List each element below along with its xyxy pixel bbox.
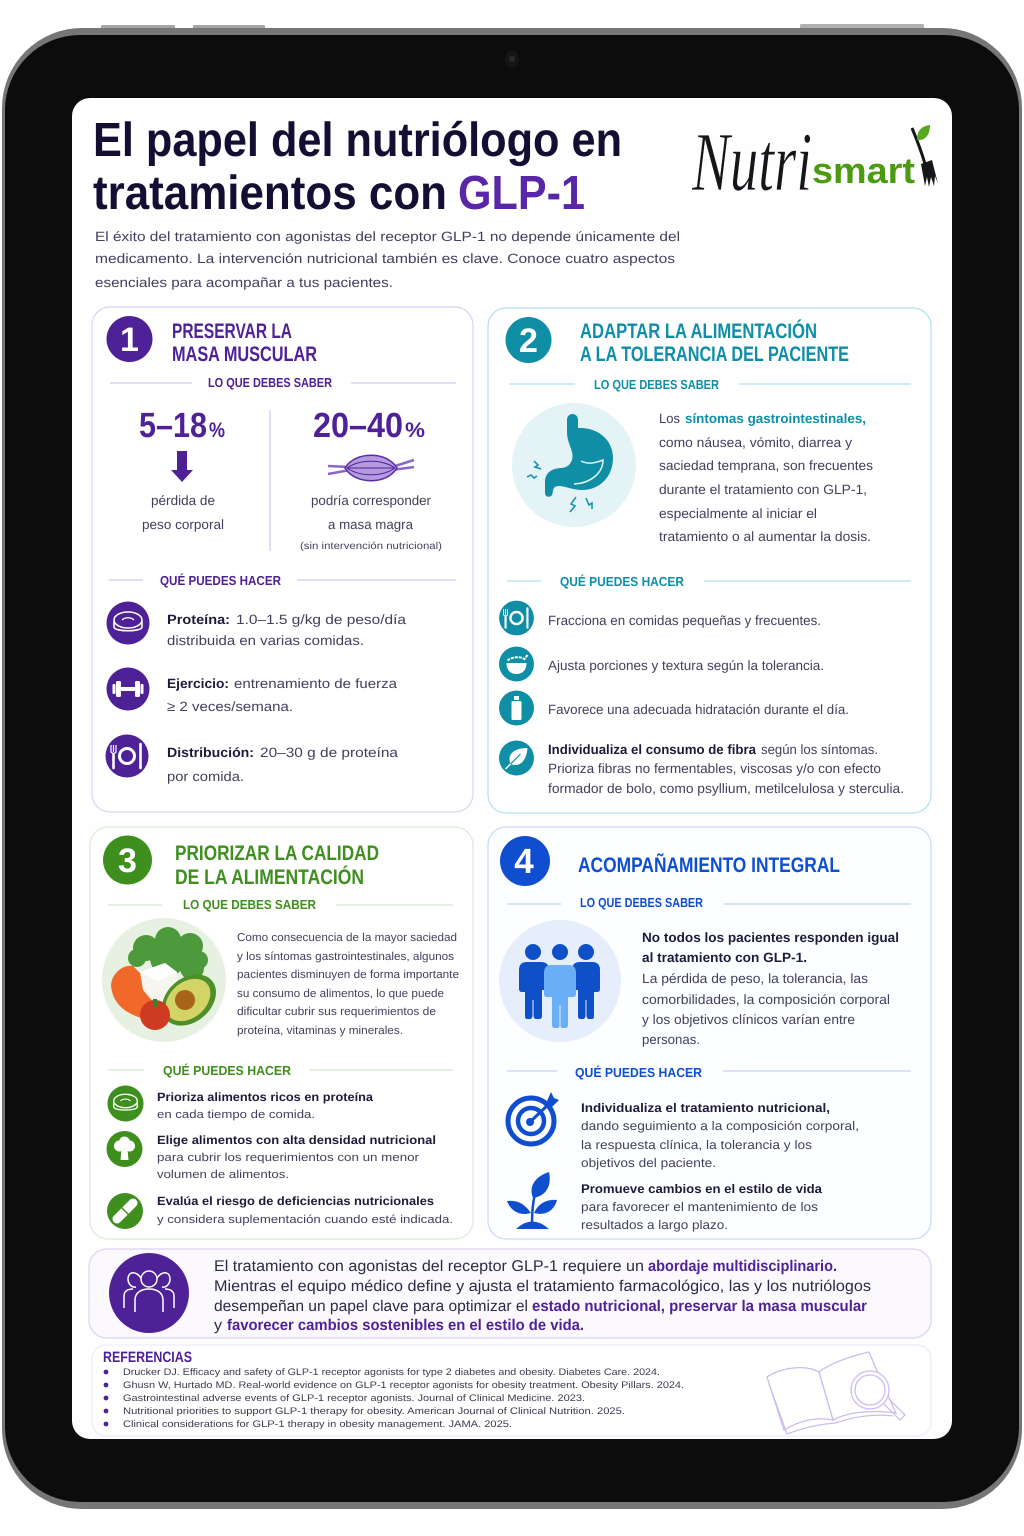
heading 2	[580, 319, 849, 366]
text: no todos los pacientes: y los objetivos clínicos varían entre	[642, 1012, 855, 1027]
banner text: El tratamiento con agonistas del receptor GLP-1 requiere un	[214, 1258, 644, 1275]
reference list: Ghusn W, Hurtado MD. Real-world evidence on GLP-1 receptor agonists for obesity treatment. Obesity Pillars. 2024.	[123, 1380, 684, 1391]
icon: bottle	[499, 690, 534, 726]
icon: group of people	[499, 920, 621, 1042]
text: síntomas gastrointestinales: saciedad temprana, son frecuentes	[659, 458, 873, 473]
icon: protein bowl	[107, 1085, 144, 1122]
text: síntomas gastrointestinales	[659, 411, 873, 544]
intro text: medicamento. La intervención nutricional también es clave. Conoce cuatro aspectos	[95, 251, 675, 266]
item: prioriza: en cada tiempo de comida.	[157, 1109, 315, 1121]
subheading: qué puedes hacer: QUÉ PUEDES HACER	[575, 1065, 703, 1080]
item: ejercicio: Ejercicio:	[167, 676, 229, 691]
text: consecuencia: pacientes disminuyen de forma importante	[237, 969, 459, 981]
label: podría corresponder a masa magra	[300, 493, 442, 552]
text: consecuencia	[237, 932, 459, 1037]
text: consecuencia: dificultar cubrir sus requerimientos de	[237, 1006, 436, 1018]
icon: down arrow	[171, 451, 193, 482]
item: individualiza tratamiento: la respuesta clínica, la tolerancia y los	[581, 1138, 812, 1152]
item: proteína: 1.0–1.5 g/kg de peso/día	[236, 612, 407, 627]
reference list: Drucker DJ. Efficacy and safety of GLP-1 receptor agonists for type 2 diabetes and obesity. Diabetes Care. 2024.	[123, 1367, 660, 1378]
label: pérdida de peso corporal: peso corporal	[142, 517, 224, 532]
label: podría corresponder a masa magra: a masa magra	[328, 517, 413, 532]
item: elige: para cubrir los requerimientos con un menor	[157, 1152, 419, 1164]
text: síntomas gastrointestinales: síntomas gastrointestinales,	[685, 411, 866, 426]
item: distribución: 20–30 g de proteína	[260, 745, 399, 760]
label: podría corresponder a masa magra: podría corresponder	[311, 493, 431, 508]
reference list: Clinical considerations for GLP-1 therapy in obesity management. JAMA. 2025.	[123, 1419, 512, 1430]
banner text: favorecer cambios sostenibles en el estilo de vida.	[227, 1317, 584, 1334]
item: promueve: Promueve cambios en el estilo de vida	[581, 1182, 823, 1196]
text: no todos los pacientes	[642, 930, 899, 1047]
item: promueve: resultados a largo plazo.	[581, 1218, 728, 1232]
heading 1	[172, 320, 317, 366]
text: síntomas gastrointestinales: tratamiento o al aumentar la dosis.	[659, 529, 871, 544]
reference list: Gastrointestinal adverse events of GLP-1 receptor agonists. Journal of Clinical Medicine. 2023.	[123, 1393, 585, 1404]
label: pérdida de peso corporal: pérdida de	[151, 493, 215, 508]
icon: protein bowl	[106, 602, 150, 644]
subheading: lo que debes saber: LO QUE DEBES SABER	[594, 377, 720, 392]
logo: Nutrismart: Nutri	[691, 116, 812, 209]
text: consecuencia: su consumo de alimentos, lo que puede	[237, 988, 444, 1000]
title: GLP-1	[458, 167, 585, 220]
panel: referencias	[92, 1345, 931, 1436]
icon: plate	[106, 734, 148, 778]
banner text	[214, 1258, 871, 1334]
heading 3: PRIORIZAR LA CALIDAD	[175, 842, 379, 865]
text: síntomas gastrointestinales: como náusea, vómito, diarrea y	[659, 435, 852, 450]
text: síntomas gastrointestinales: especialmente al iniciar el	[659, 506, 817, 521]
reference list: Nutritional priorities to support GLP-1 therapy for obesity. American Journal of Clinical Nutrition. 2025.	[123, 1406, 625, 1417]
number badge 2	[506, 317, 552, 363]
heading 1: PRESERVAR LA	[172, 320, 292, 343]
item: fracciona: Fracciona en comidas pequeñas y frecuentes.	[548, 613, 821, 628]
icon: target	[508, 1092, 559, 1144]
icon: stomach	[512, 403, 636, 527]
stat: 20-40%: %	[405, 419, 425, 442]
stat: 20-40%: 20–40	[313, 406, 403, 445]
item: promueve: para favorecer el mantenimiento de los	[581, 1200, 818, 1214]
item: elige: Elige alimentos con alta densidad nutricional	[157, 1133, 436, 1147]
item: ajusta: Ajusta porciones y textura según la tolerancia.	[548, 658, 824, 673]
banner text: y	[214, 1317, 222, 1334]
item: prioriza	[157, 1090, 373, 1121]
heading: referencias: REFERENCIAS	[103, 1349, 192, 1366]
icon: bowl	[499, 646, 534, 682]
text: síntomas gastrointestinales: Los	[659, 411, 680, 426]
banner text: desempeñan un papel clave para optimizar el	[214, 1298, 528, 1315]
panel 4: acompañamiento integral	[488, 827, 931, 1239]
item: distribución: por comida.	[167, 769, 244, 784]
item: elige: volumen de alimentos.	[157, 1169, 289, 1181]
number badge 3	[103, 836, 152, 884]
heading 4: ACOMPAÑAMIENTO INTEGRAL	[578, 853, 840, 877]
icon: capsule	[107, 1193, 143, 1229]
panel 2: adaptar la alimentación	[488, 308, 931, 813]
icon: leaf	[499, 740, 534, 776]
icon: muscle	[328, 455, 414, 481]
item: individualiza tratamiento: Individualiza el tratamiento nutricional,	[581, 1101, 830, 1115]
heading 3: DE LA ALIMENTACIÓN	[175, 865, 364, 889]
text: no todos los pacientes: La pérdida de peso, la tolerancia, las	[642, 971, 868, 986]
reference list	[104, 1367, 684, 1430]
subheading: qué puedes hacer: QUÉ PUEDES HACER	[560, 574, 685, 589]
item: individualiza fibra: según los síntomas.	[761, 742, 878, 757]
screen background	[72, 98, 952, 1439]
heading 1: MASA MUSCULAR	[172, 343, 317, 366]
illustration: food	[102, 918, 226, 1042]
item: elige	[157, 1133, 436, 1181]
item: ejercicio: ≥ 2 veces/semana.	[167, 699, 293, 714]
number badge 1: 1	[120, 321, 139, 359]
stat: 5-18%: 5–18	[139, 406, 207, 445]
number badge 1	[106, 316, 152, 362]
number badge 2: 2	[519, 322, 538, 360]
text: consecuencia: Como consecuencia de la mayor saciedad	[237, 932, 457, 944]
number badge 4	[500, 836, 550, 886]
item: evalúa	[157, 1194, 453, 1226]
text: consecuencia: y los síntomas gastrointestinales, algunos	[237, 951, 454, 963]
text: consecuencia: proteína, vitaminas y minerales.	[237, 1025, 403, 1037]
subheading: lo que debes saber: LO QUE DEBES SABER	[580, 895, 704, 910]
stat: 5-18%: %	[209, 419, 225, 442]
number badge 3: 3	[118, 842, 137, 880]
number badge 4: 4	[514, 842, 534, 881]
banner text: abordaje multidisciplinario.	[648, 1258, 837, 1275]
icon: team	[109, 1253, 189, 1333]
banner text: estado nutricional, preservar la masa muscular	[532, 1298, 867, 1315]
item: individualiza tratamiento: dando seguimiento a la composición corporal,	[581, 1119, 859, 1133]
subheading: qué puedes hacer: QUÉ PUEDES HACER	[160, 573, 282, 588]
item: individualiza fibra: Prioriza fibras no fermentables, viscosas y/o con efecto	[548, 761, 881, 776]
item: individualiza fibra: Individualiza el consumo de fibra	[548, 742, 756, 757]
text: síntomas gastrointestinales: durante el tratamiento con GLP-1,	[659, 482, 867, 497]
banner text: Mientras el equipo médico define y ajusta el tratamiento farmacológico, las y los nutriólogos	[214, 1278, 871, 1295]
intro text: El éxito del tratamiento con agonistas del receptor GLP-1 no depende únicamente del	[95, 229, 680, 244]
text: no todos los pacientes: al tratamiento con GLP-1.	[642, 950, 807, 965]
item: individualiza fibra: formador de bolo, como psyllium, metilcelulosa y sterculia.	[548, 781, 904, 796]
item: ejercicio: entrenamiento de fuerza	[234, 676, 398, 691]
item: prioriza: Prioriza alimentos ricos en proteína	[157, 1090, 373, 1104]
item: distribución	[167, 745, 399, 784]
icon: book with magnifier	[767, 1352, 905, 1434]
panel 3: priorizar la calidad	[90, 827, 473, 1239]
logo: Nutrismart: smart	[812, 150, 915, 191]
label: pérdida de peso corporal	[142, 493, 224, 532]
item: favorece: Favorece una adecuada hidratación durante el día.	[548, 702, 849, 717]
item: proteína	[167, 612, 407, 648]
item: proteína: Proteína:	[167, 612, 230, 627]
title: El papel del nutriólogo en	[93, 114, 622, 167]
label: podría corresponder a masa magra: (sin intervención nutricional)	[300, 541, 442, 552]
icon: broccoli	[106, 1131, 142, 1167]
item: promueve	[581, 1182, 823, 1232]
intro text	[95, 229, 680, 290]
panel 1: preservar la masa muscular	[92, 307, 473, 812]
title	[93, 114, 622, 220]
banner: abordaje multidisciplinario	[89, 1249, 931, 1338]
text: no todos los pacientes: No todos los pacientes responden igual	[642, 930, 899, 945]
title: tratamientos con	[93, 167, 447, 220]
item: individualiza tratamiento	[581, 1101, 859, 1170]
heading 2: A LA TOLERANCIA DEL PACIENTE	[580, 343, 849, 366]
item: individualiza fibra	[548, 742, 904, 796]
intro text: esenciales para acompañar a tus pacientes.	[95, 275, 393, 290]
icon: plate	[499, 601, 534, 635]
heading 2: ADAPTAR LA ALIMENTACIÓN	[580, 319, 817, 343]
item: ejercicio	[167, 676, 398, 714]
text: no todos los pacientes: comorbilidades, la composición corporal	[642, 992, 890, 1007]
item: distribución: Distribución:	[167, 745, 254, 760]
item: evalúa: Evalúa el riesgo de deficiencias nutricionales	[157, 1194, 434, 1208]
subheading: lo que debes saber: LO QUE DEBES SABER	[208, 375, 333, 390]
text: no todos los pacientes: personas.	[642, 1032, 700, 1047]
item: proteína: distribuida en varias comidas.	[167, 633, 364, 648]
item: individualiza tratamiento: objetivos del paciente.	[581, 1156, 716, 1170]
heading 3	[175, 842, 379, 889]
subheading: lo que debes saber: LO QUE DEBES SABER	[183, 897, 317, 912]
icon: dumbbell	[106, 668, 150, 710]
item: evalúa: y considera suplementación cuando esté indicada.	[157, 1214, 453, 1226]
icon: sprout	[507, 1172, 557, 1229]
subheading: qué puedes hacer: QUÉ PUEDES HACER	[163, 1063, 292, 1078]
